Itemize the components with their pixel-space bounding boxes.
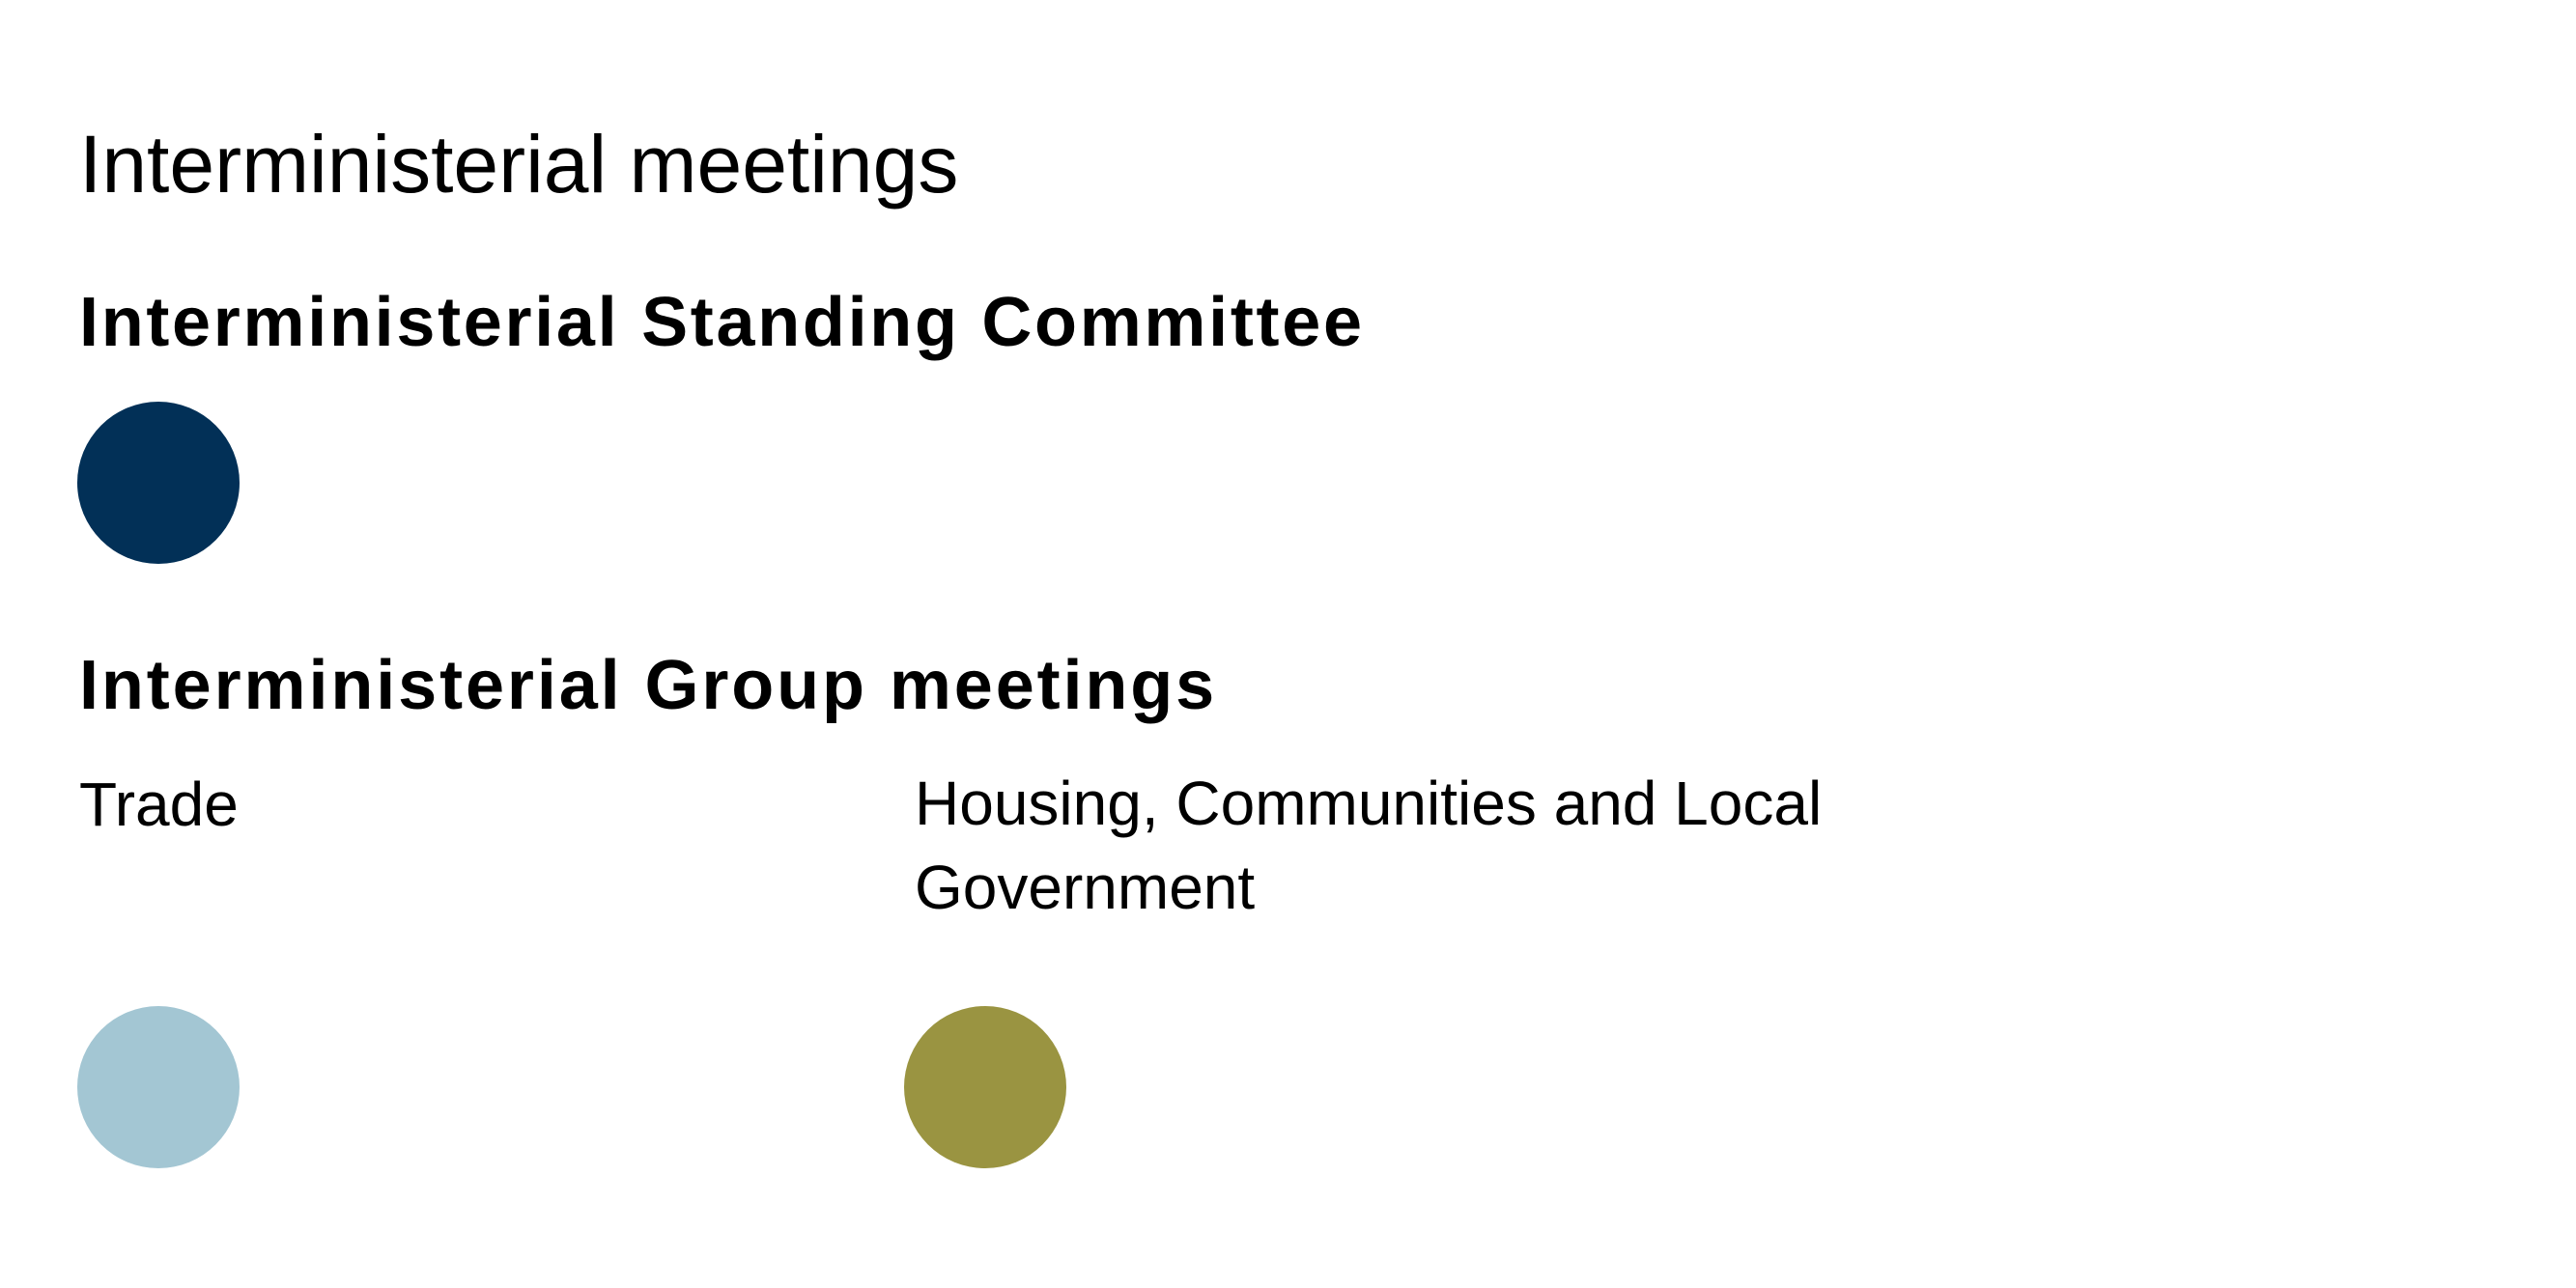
label: housing bbox=[915, 769, 1822, 922]
heading: group meetings: Interministerial Group meetings bbox=[79, 647, 1217, 724]
heading: standing committee: Interministerial Standing Committee bbox=[79, 284, 1365, 361]
icon: standing committee circle bbox=[77, 402, 240, 564]
label: trade: Trade bbox=[79, 770, 239, 839]
title: Interministerial meetings bbox=[79, 119, 958, 210]
icon: trade circle bbox=[77, 1006, 240, 1168]
icon: housing circle bbox=[904, 1006, 1066, 1168]
label: housing: Housing, Communities and Local bbox=[915, 769, 1822, 838]
label: housing: Government bbox=[915, 853, 1255, 922]
